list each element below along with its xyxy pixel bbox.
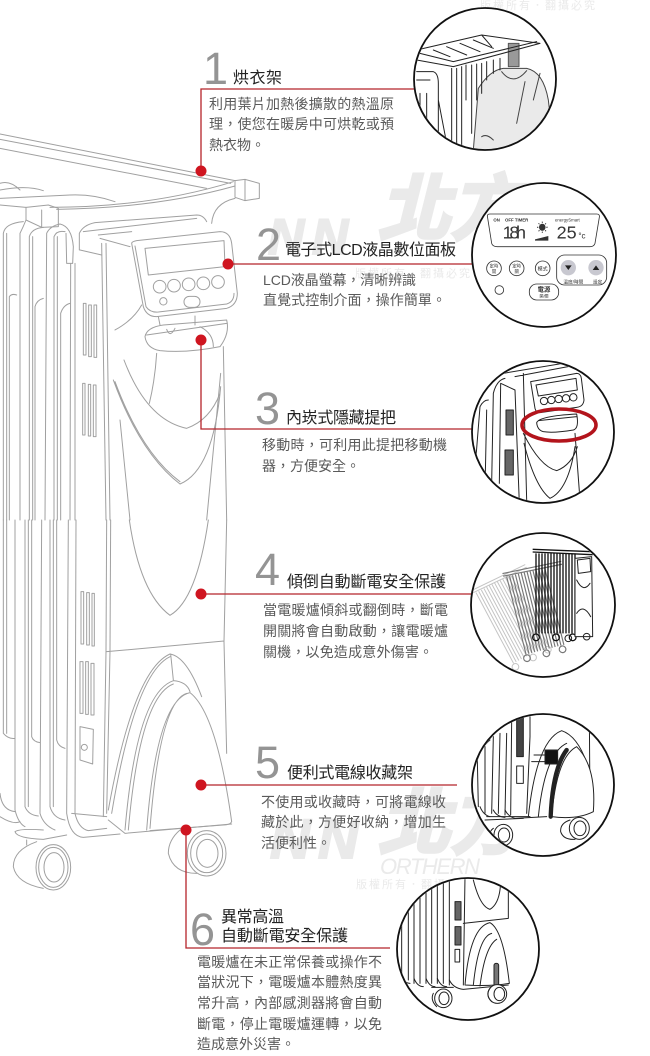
LCD screen: 25 xyxy=(557,222,577,242)
title 6: 異常高溫 xyxy=(221,908,284,926)
number 4: 4 xyxy=(255,544,280,595)
watermark: lower logo: N xyxy=(318,807,360,870)
description 1 xyxy=(209,96,394,153)
watermark: upper logo: 北方 xyxy=(378,170,531,250)
number 3: 3 xyxy=(255,383,280,434)
callout 1: drying rack xyxy=(196,43,415,176)
description 5: 藏於此，方便好收納，增加生 xyxy=(261,814,446,830)
description 3 xyxy=(262,437,447,474)
description 6: 常升高，內部感測器將會自動 xyxy=(197,995,382,1011)
leader line 6 xyxy=(180,824,390,948)
description 3: 器，方便安全。 xyxy=(262,458,360,474)
leader line 2 xyxy=(222,258,472,270)
description 4: 當電暖爐傾斜或翻倒時，斷電 xyxy=(263,602,448,618)
title 1: 烘衣架 xyxy=(233,69,282,87)
description 6 xyxy=(197,954,382,1052)
detail circle 3: handle with red ring xyxy=(472,361,614,503)
description 3: 移動時，可利用此提把移動機 xyxy=(262,437,447,453)
watermark: lower logo: ORTHERN xyxy=(380,854,480,879)
detail circle 4: tip-over sequence xyxy=(471,533,615,677)
description 5: 活便利性。 xyxy=(261,835,331,851)
description 4 xyxy=(263,602,448,660)
description 6: 當狀況下，電暖爐本體熱度異 xyxy=(197,974,382,990)
title 5: 便利式電線收藏架 xyxy=(287,764,413,782)
watermark: lower logo: N xyxy=(270,807,312,870)
callout 6: overheat cut-off xyxy=(180,824,390,1052)
watermark: lower logo: 北方 xyxy=(378,784,531,864)
description 4: 開關將會自動啟動，讓電暖爐 xyxy=(263,623,448,639)
detail circle 6: overheat sensor xyxy=(397,877,539,1020)
callout 3: hidden handle xyxy=(196,334,472,474)
callout 4: tilt cut-off xyxy=(196,544,472,660)
radiator lower half xyxy=(0,520,232,890)
button labels: 關 xyxy=(515,269,519,275)
title 3: 內崁式隱藏提把 xyxy=(286,409,396,427)
button labels xyxy=(490,262,603,298)
button labels: 溫度/時間 xyxy=(563,279,584,286)
button labels: 設定 xyxy=(593,279,603,286)
button labels: 定時 xyxy=(490,262,499,269)
leader line 3 xyxy=(196,334,472,429)
watermark: upper logo: N xyxy=(268,209,305,265)
button labels: 開 xyxy=(492,269,496,275)
watermark: upper logo: 版權所有．翻攝必究 xyxy=(480,0,597,12)
title 2: 電子式LCD液晶數位面板 xyxy=(285,241,456,259)
description 6: 電暖爐在未正常保養或操作不 xyxy=(197,954,382,970)
radiator line drawing xyxy=(0,134,259,890)
LCD screen: ON xyxy=(493,218,500,223)
callout 5: cord storage xyxy=(196,737,457,851)
description 6: 造成意外災害。 xyxy=(197,1036,295,1052)
description 1: 理，使您在暖房中可烘乾或預 xyxy=(209,116,394,132)
description 6: 斷電，停止電暖爐運轉，以免 xyxy=(197,1016,382,1032)
description 2 xyxy=(263,272,446,308)
radiator upper half xyxy=(0,134,259,520)
LCD screen: ☀ xyxy=(537,222,548,235)
button labels: 模式 xyxy=(538,265,548,272)
watermark: lower logo: 版權所有．翻攝必究 xyxy=(356,877,473,891)
button labels: 定時 xyxy=(512,262,522,269)
control buttons xyxy=(487,255,607,300)
number 2: 2 xyxy=(256,219,281,270)
watermark: upper logo: N xyxy=(312,209,349,265)
button labels: 開/關 xyxy=(539,292,549,298)
description 5: 不使用或收藏時，可將電線收 xyxy=(261,794,446,810)
title 6: 自動斷電安全保護 xyxy=(221,927,348,945)
number 5: 5 xyxy=(255,737,280,788)
LCD screen: energySmart xyxy=(555,218,581,223)
watermark: upper logo xyxy=(268,0,597,280)
description 2: LCD液晶螢幕，清晰辨識 xyxy=(263,272,416,288)
number 1: 1 xyxy=(203,43,228,94)
detail circle 5: cord storage with plug xyxy=(472,713,614,856)
LCD screen: °c xyxy=(578,231,586,240)
LCD screen: 18h xyxy=(503,222,526,242)
description 2: 直覺式控制介面，操作簡單。 xyxy=(263,292,446,308)
description 5 xyxy=(261,794,446,851)
description 4: 關機，以免造成意外傷害。 xyxy=(263,644,433,660)
title 4: 傾倒自動斷電安全保護 xyxy=(287,573,446,591)
detail circle 1: rack with hanging sweater xyxy=(414,8,556,150)
LCD screen: OFF TIMER xyxy=(505,218,529,223)
leader line 1 xyxy=(196,89,415,176)
title 6 xyxy=(221,908,348,945)
description 1: 熱衣物。 xyxy=(209,137,265,153)
leader line 5 xyxy=(196,780,457,790)
red highlight ring xyxy=(522,409,596,441)
LCD screen xyxy=(487,214,599,247)
watermark: lower logo xyxy=(270,784,531,891)
callout 2: LCD panel xyxy=(222,219,472,308)
watermark: upper logo: 版權所有．翻攝必究 xyxy=(355,266,472,280)
description 1: 利用葉片加熱後擴散的熱溫原 xyxy=(209,96,394,112)
detail circle 2: LCD control panel xyxy=(472,183,616,327)
leader line 4 xyxy=(196,588,472,600)
button labels: 電源 xyxy=(538,285,551,294)
number 6: 6 xyxy=(190,904,215,955)
